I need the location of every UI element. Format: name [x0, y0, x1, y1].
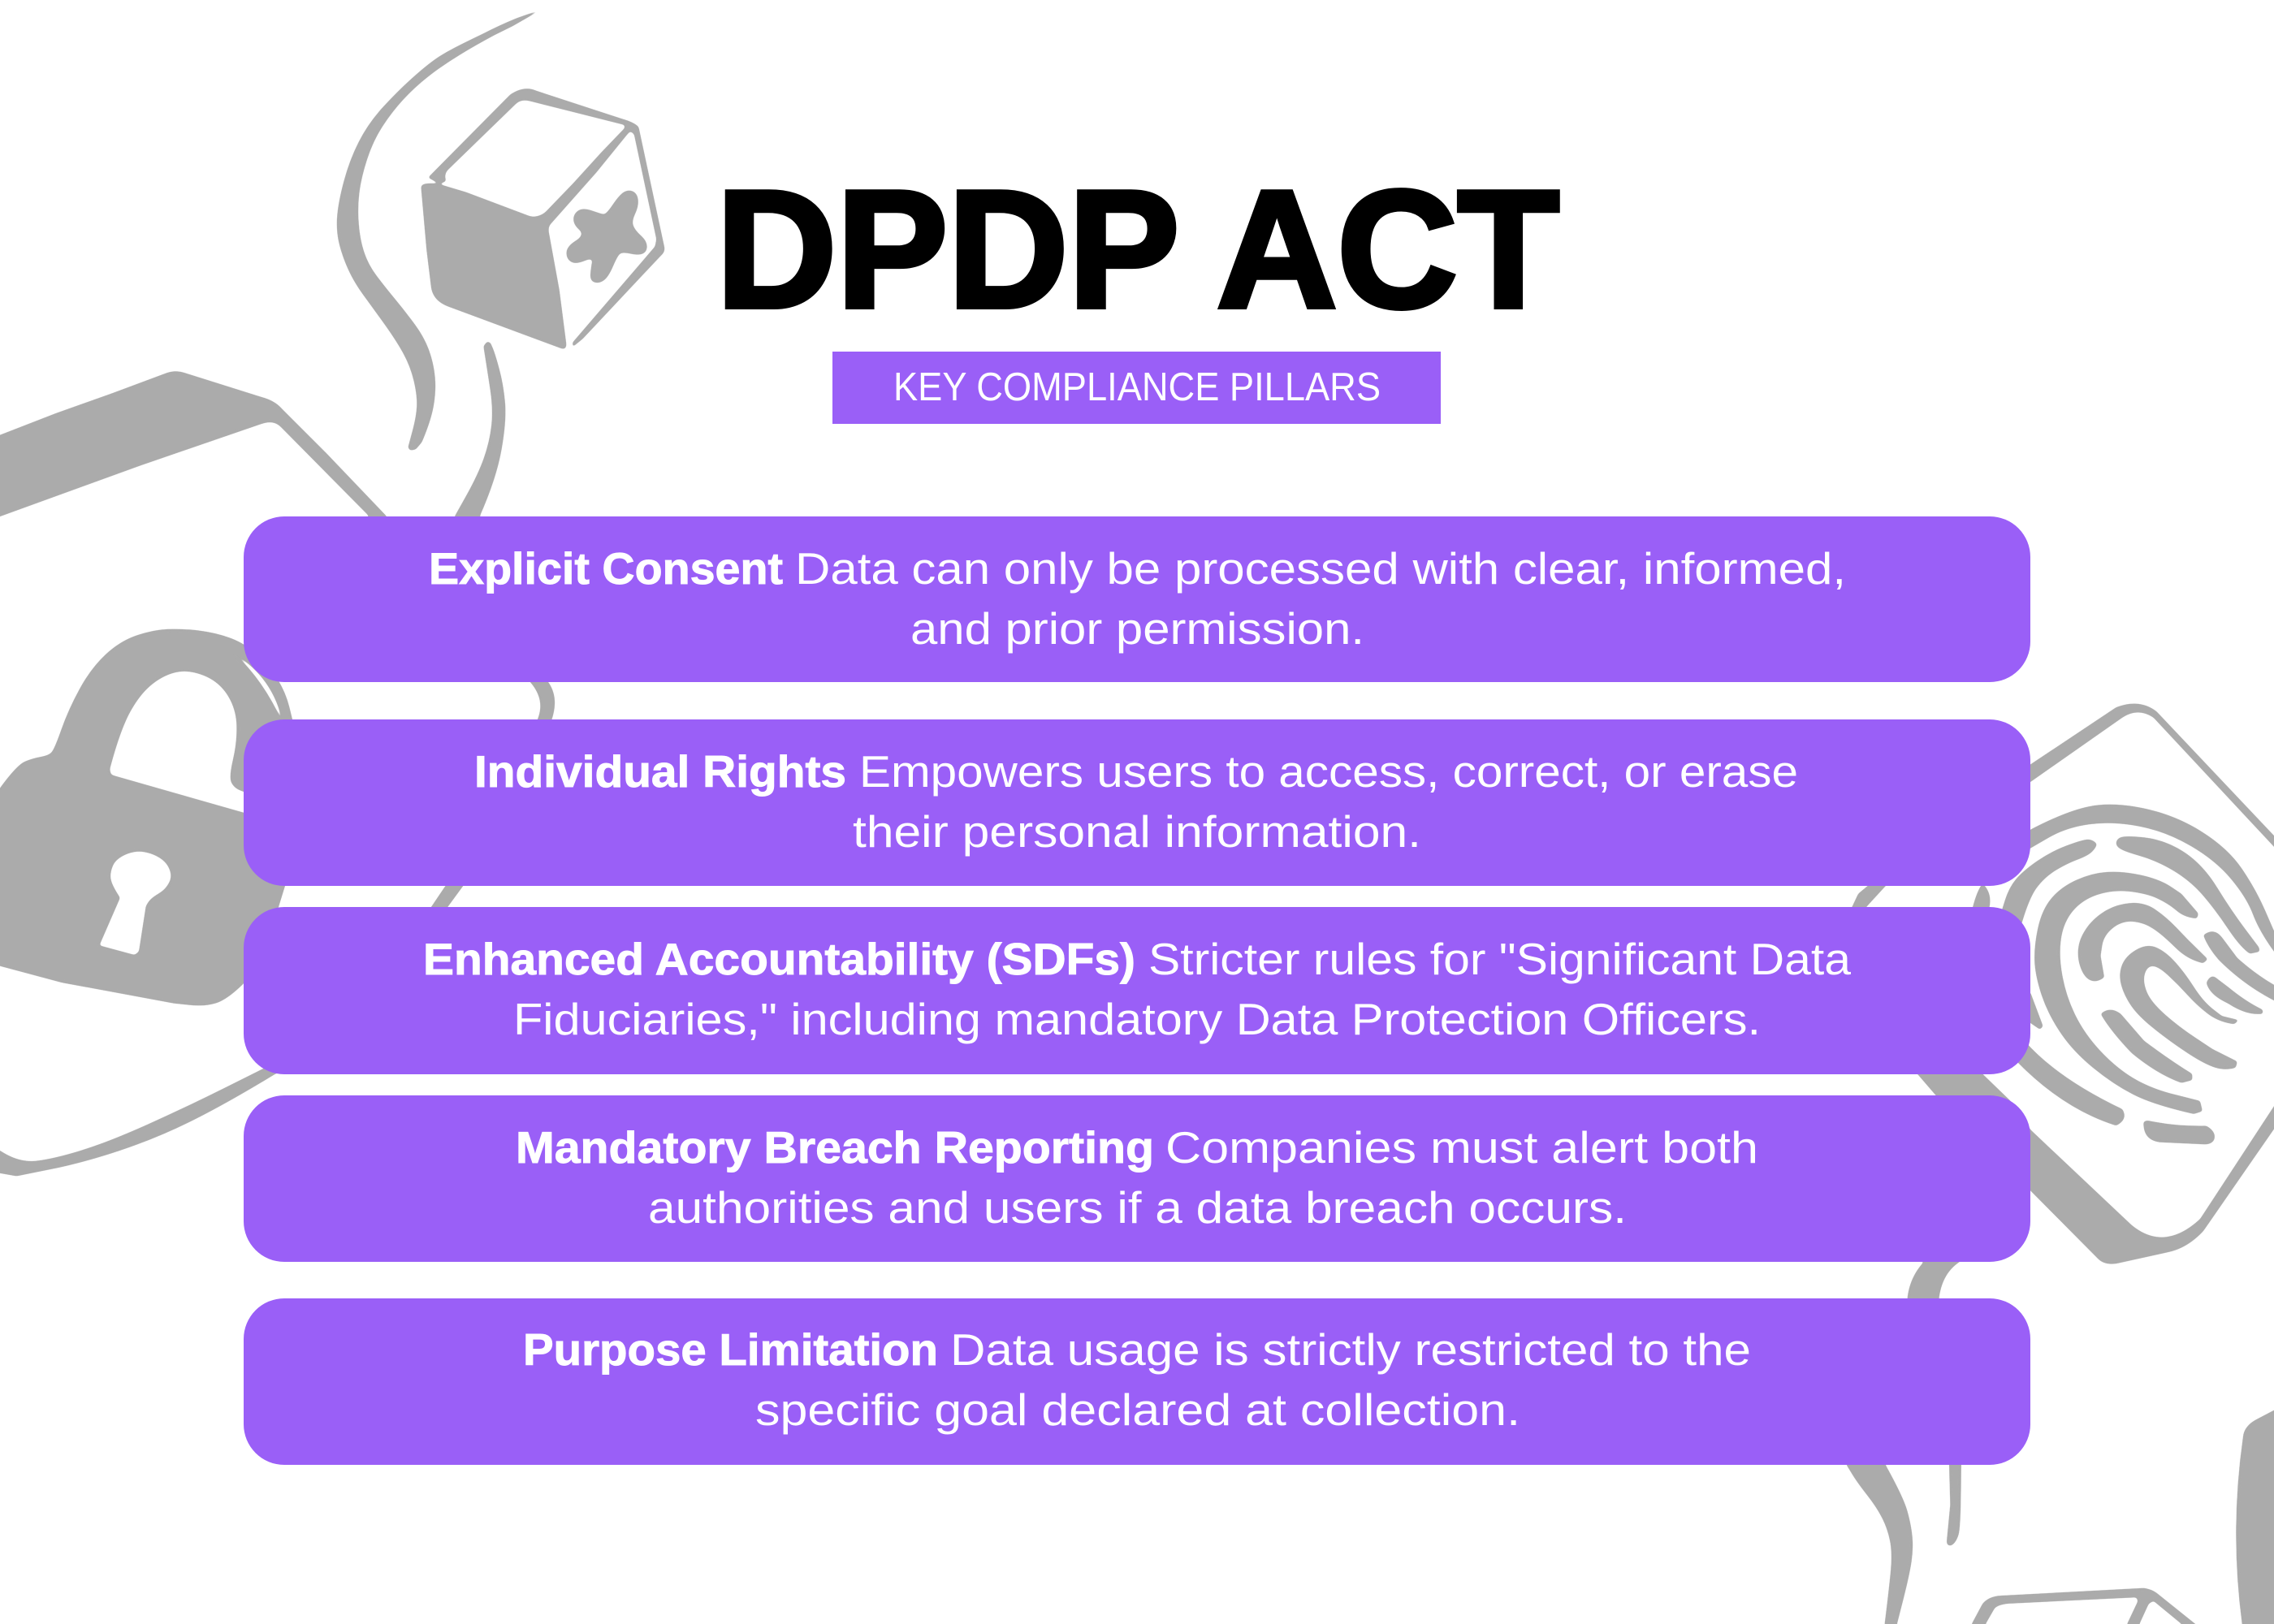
panel: purpose limitation: [244, 1298, 2030, 1465]
icon: large outlined shape, lower left edge and fragments: [0, 672, 555, 1176]
panel: enhanced accountability: Fiduciaries," including mandatory Data Protection Officers.: [513, 994, 1761, 1044]
panel: purpose limitation: Data usage is strictly restricted to the: [950, 1324, 1751, 1375]
icon: large outlined shape, top left: [0, 371, 387, 525]
fingerprint ridges: [2001, 805, 2274, 1144]
panel: mandatory breach reporting: authorities and users if a data breach occurs.: [648, 1182, 1627, 1233]
icon: cube with asterisk: [421, 89, 664, 349]
tile frame: [1850, 703, 2274, 1264]
title: DPDP ACT: [716, 156, 1559, 343]
panel: explicit consent: [244, 516, 2030, 682]
panel: individual rights: [244, 719, 2030, 886]
subtitle banner: KEY COMPLIANCE PILLARS: [893, 365, 1381, 409]
panel: explicit consent: Explicit Consent: [429, 543, 783, 594]
icon: swoosh wire and cube, lower right: [1846, 1259, 2274, 1624]
panel: purpose limitation: Purpose Limitation: [523, 1324, 938, 1375]
panel: purpose limitation: specific goal declared at collection.: [755, 1384, 1520, 1435]
icon: fingerprint tile: [1850, 703, 2274, 1264]
panel: explicit consent: and prior permission.: [910, 603, 1364, 654]
panel: mandatory breach reporting: Companies must alert both: [1165, 1122, 1758, 1173]
icon: padlock: [0, 629, 298, 1005]
panel: mandatory breach reporting: Mandatory Breach Reporting: [516, 1122, 1154, 1173]
icon: swoosh wire, top left: [337, 9, 543, 525]
panel: enhanced accountability: [244, 907, 2030, 1074]
panel: enhanced accountability: Stricter rules for "Significant Data: [1148, 934, 1851, 984]
panel: explicit consent: Data can only be processed with clear, informed,: [795, 543, 1846, 594]
panel: enhanced accountability: Enhanced Accountability (SDFs): [423, 934, 1135, 984]
panel: individual rights: Empowers users to access, correct, or erase: [859, 746, 1798, 797]
panel: individual rights: their personal information.: [853, 806, 1421, 857]
panel: mandatory breach reporting: [244, 1095, 2030, 1262]
panel: individual rights: Individual Rights: [474, 746, 846, 797]
subtitle banner: [832, 352, 1441, 424]
